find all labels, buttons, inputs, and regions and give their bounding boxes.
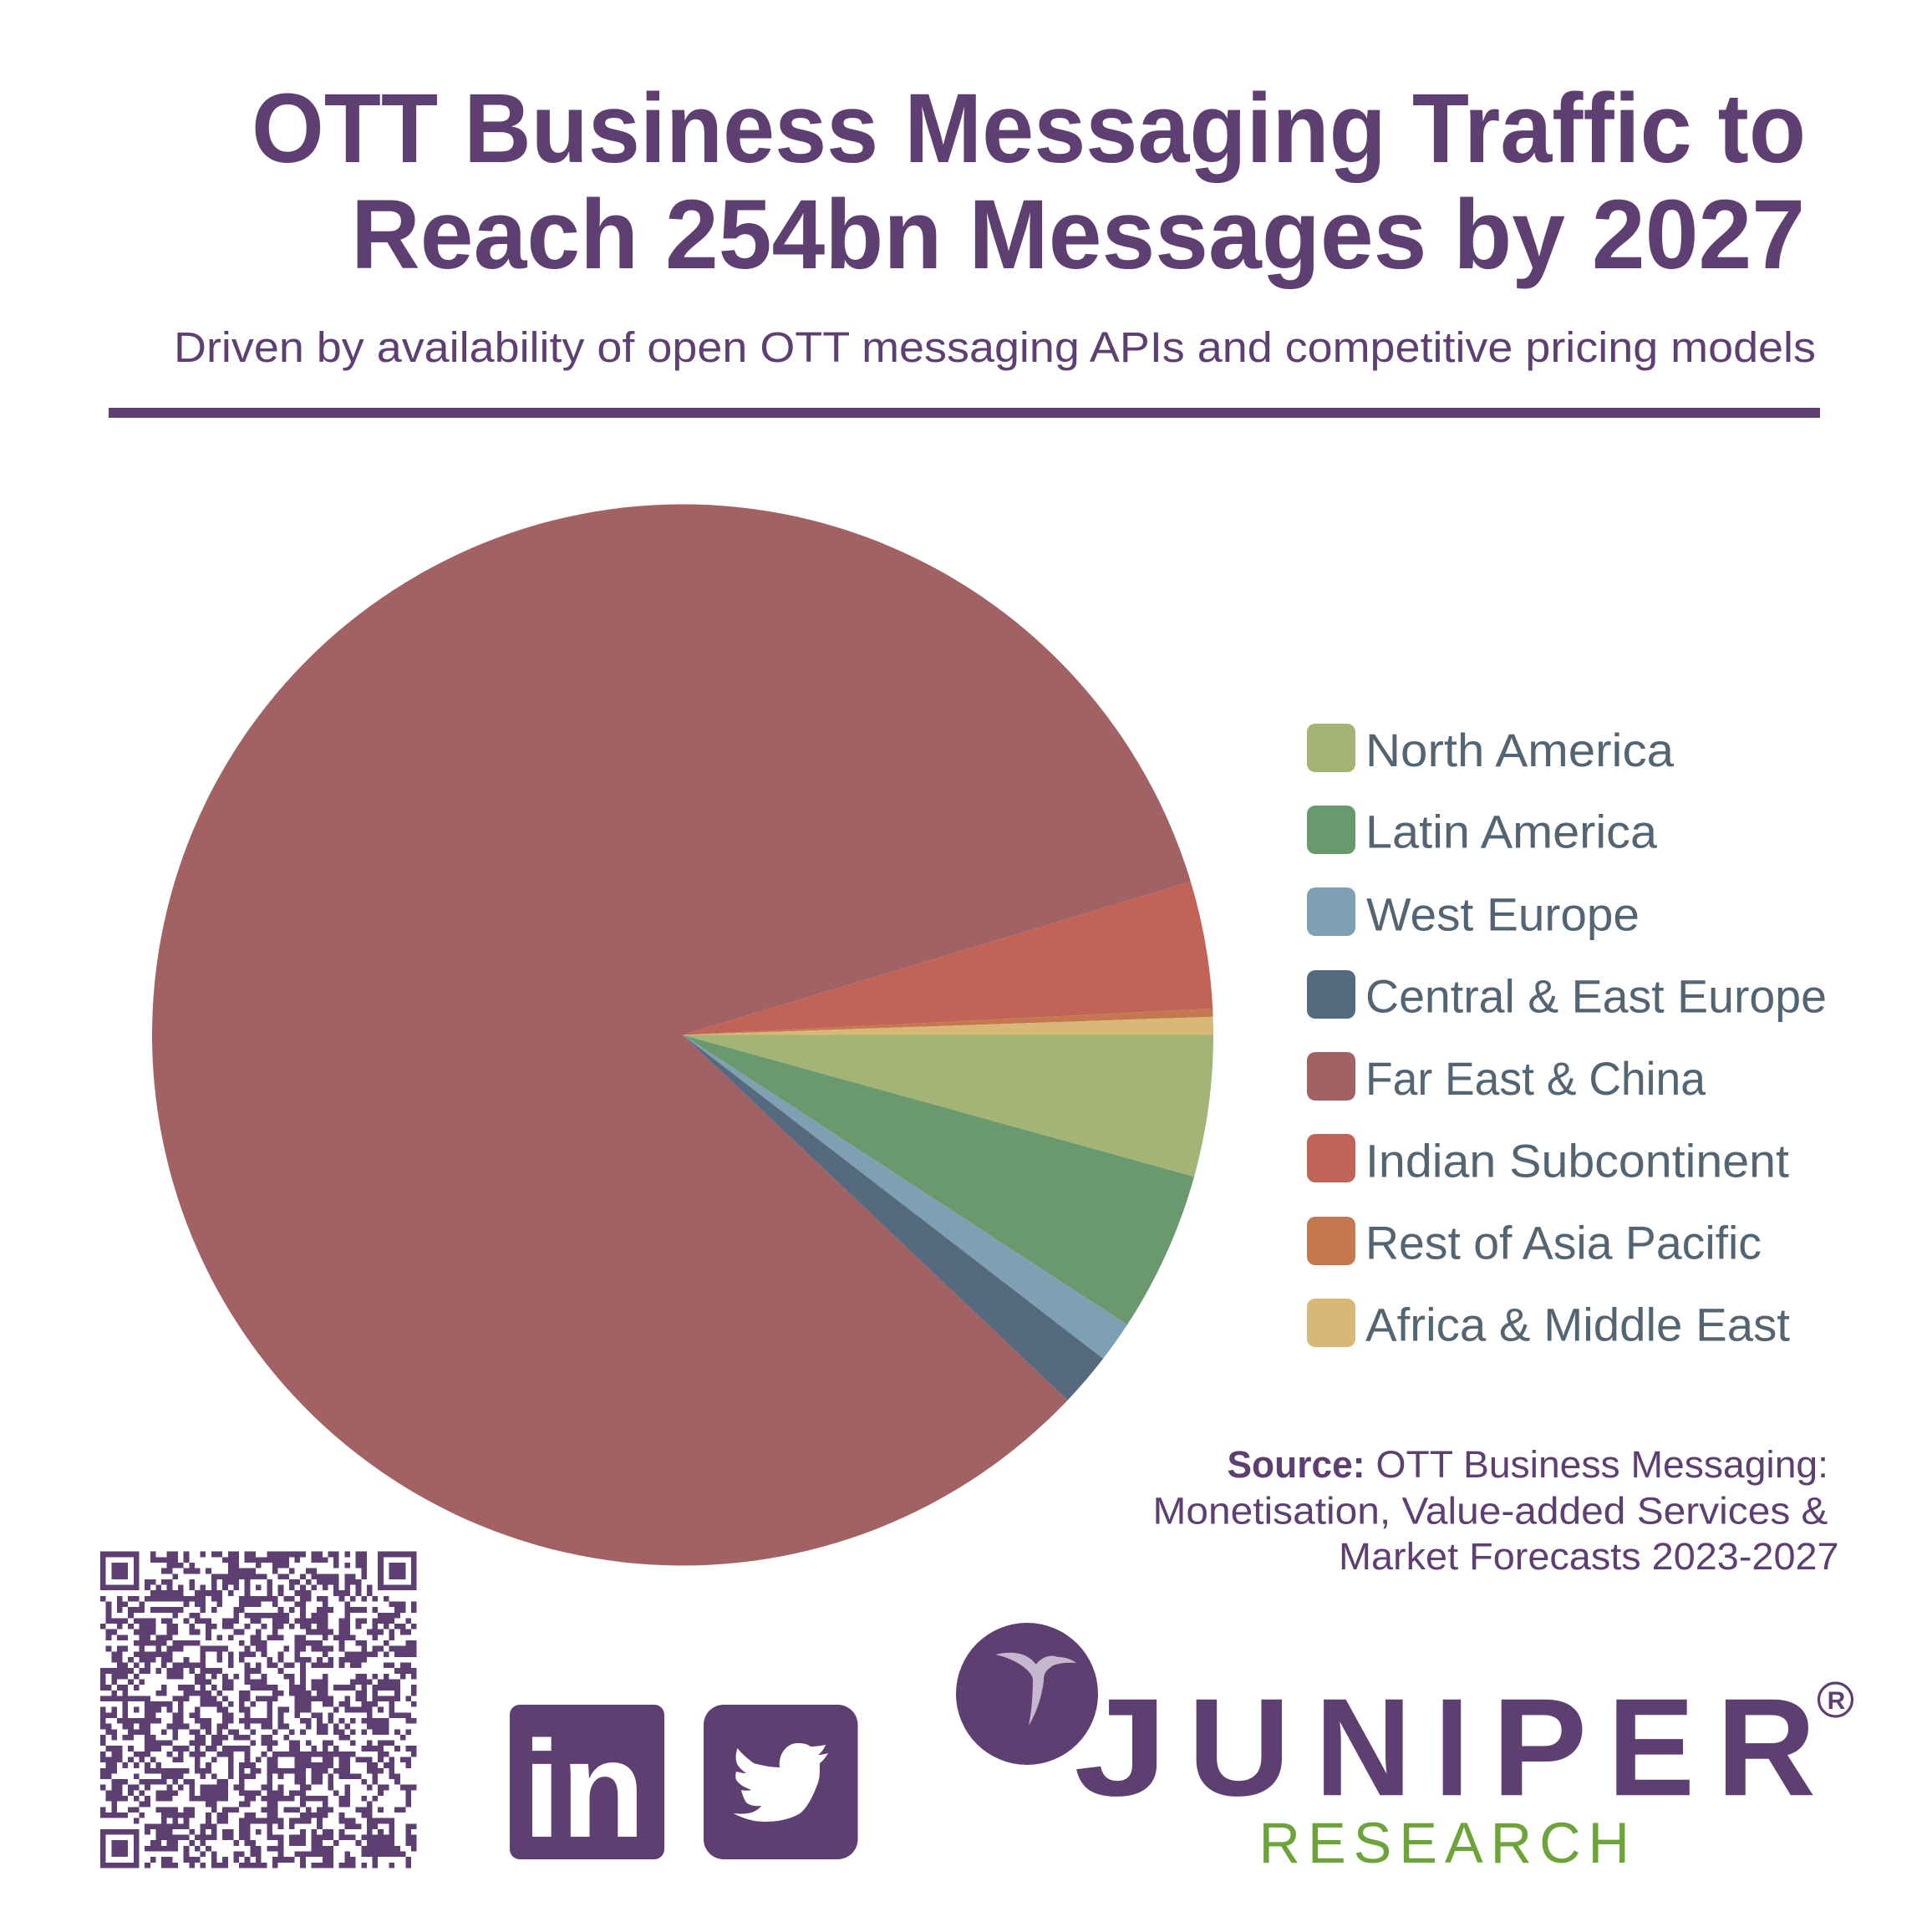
logo emblem [956, 1623, 1098, 1765]
wordmark: JUNIPER: P [1492, 1670, 1587, 1825]
QR code [100, 1552, 417, 1868]
wordmark: JUNIPER: I [1435, 1670, 1469, 1825]
source note: Source: [1227, 1443, 1365, 1486]
legend item: Rest of Asia Pacific: Rest of Asia Pacific [1365, 1217, 1762, 1269]
source note [1153, 1443, 1839, 1578]
wordmark: JUNIPER: J [1074, 1670, 1168, 1825]
slice: Africa & Middle East [683, 1017, 1213, 1035]
legend item: Far East & China: Far East & China [1365, 1052, 1706, 1105]
slice: Rest of Asia Pacific [683, 1009, 1213, 1035]
legend item: Central & East Europe: Central & East Europe [1365, 969, 1827, 1023]
legend [1307, 724, 1827, 1350]
legend item: West Europe: West Europe [1366, 887, 1640, 941]
legend item: Indian Subcontinent: Indian Subcontinent [1365, 1135, 1789, 1187]
slice: Latin America [683, 1035, 1194, 1324]
slice: Central & East Europe [683, 1035, 1103, 1401]
registered mark: R [1828, 1687, 1846, 1715]
wordmark: JUNIPER: N [1314, 1670, 1411, 1825]
logo: Juniper Research [956, 1623, 1852, 1875]
legend item: Africa & Middle East: Africa & Middle East [1365, 1299, 1790, 1350]
wordmark: RESEARCH: RESEARCH [1258, 1811, 1629, 1875]
wordmark: JUNIPER: R [1716, 1670, 1816, 1825]
slice: Far East & China [152, 504, 1191, 1565]
wordmark: JUNIPER: U [1187, 1670, 1290, 1825]
slice: North America [683, 1035, 1213, 1177]
icon: LinkedIn: in [523, 1712, 645, 1866]
pie chart [152, 504, 1213, 1565]
source note: Market Forecasts 2023-2027 [1339, 1535, 1839, 1578]
title [252, 74, 1806, 290]
subtitle: Driven by availability of open OTT messaging APIs and competitive pricing models [174, 323, 1816, 371]
legend item: North America: North America [1365, 724, 1675, 776]
source note: Monetisation, Value-added Services & [1153, 1489, 1828, 1533]
slice: Indian Subcontinent [683, 882, 1213, 1035]
title: Reach 254bn Messages by 2027 [351, 180, 1805, 290]
wordmark: JUNIPER [1074, 1670, 1816, 1825]
source note: OTT Business Messaging: [1375, 1443, 1828, 1486]
slice: West Europe [683, 1035, 1127, 1359]
registered mark [1818, 1683, 1852, 1716]
legend item: Latin America: Latin America [1365, 806, 1658, 857]
wordmark: JUNIPER: E [1608, 1670, 1695, 1825]
title: OTT Business Messaging Traffic to [252, 74, 1806, 184]
icon: Twitter [704, 1705, 857, 1859]
